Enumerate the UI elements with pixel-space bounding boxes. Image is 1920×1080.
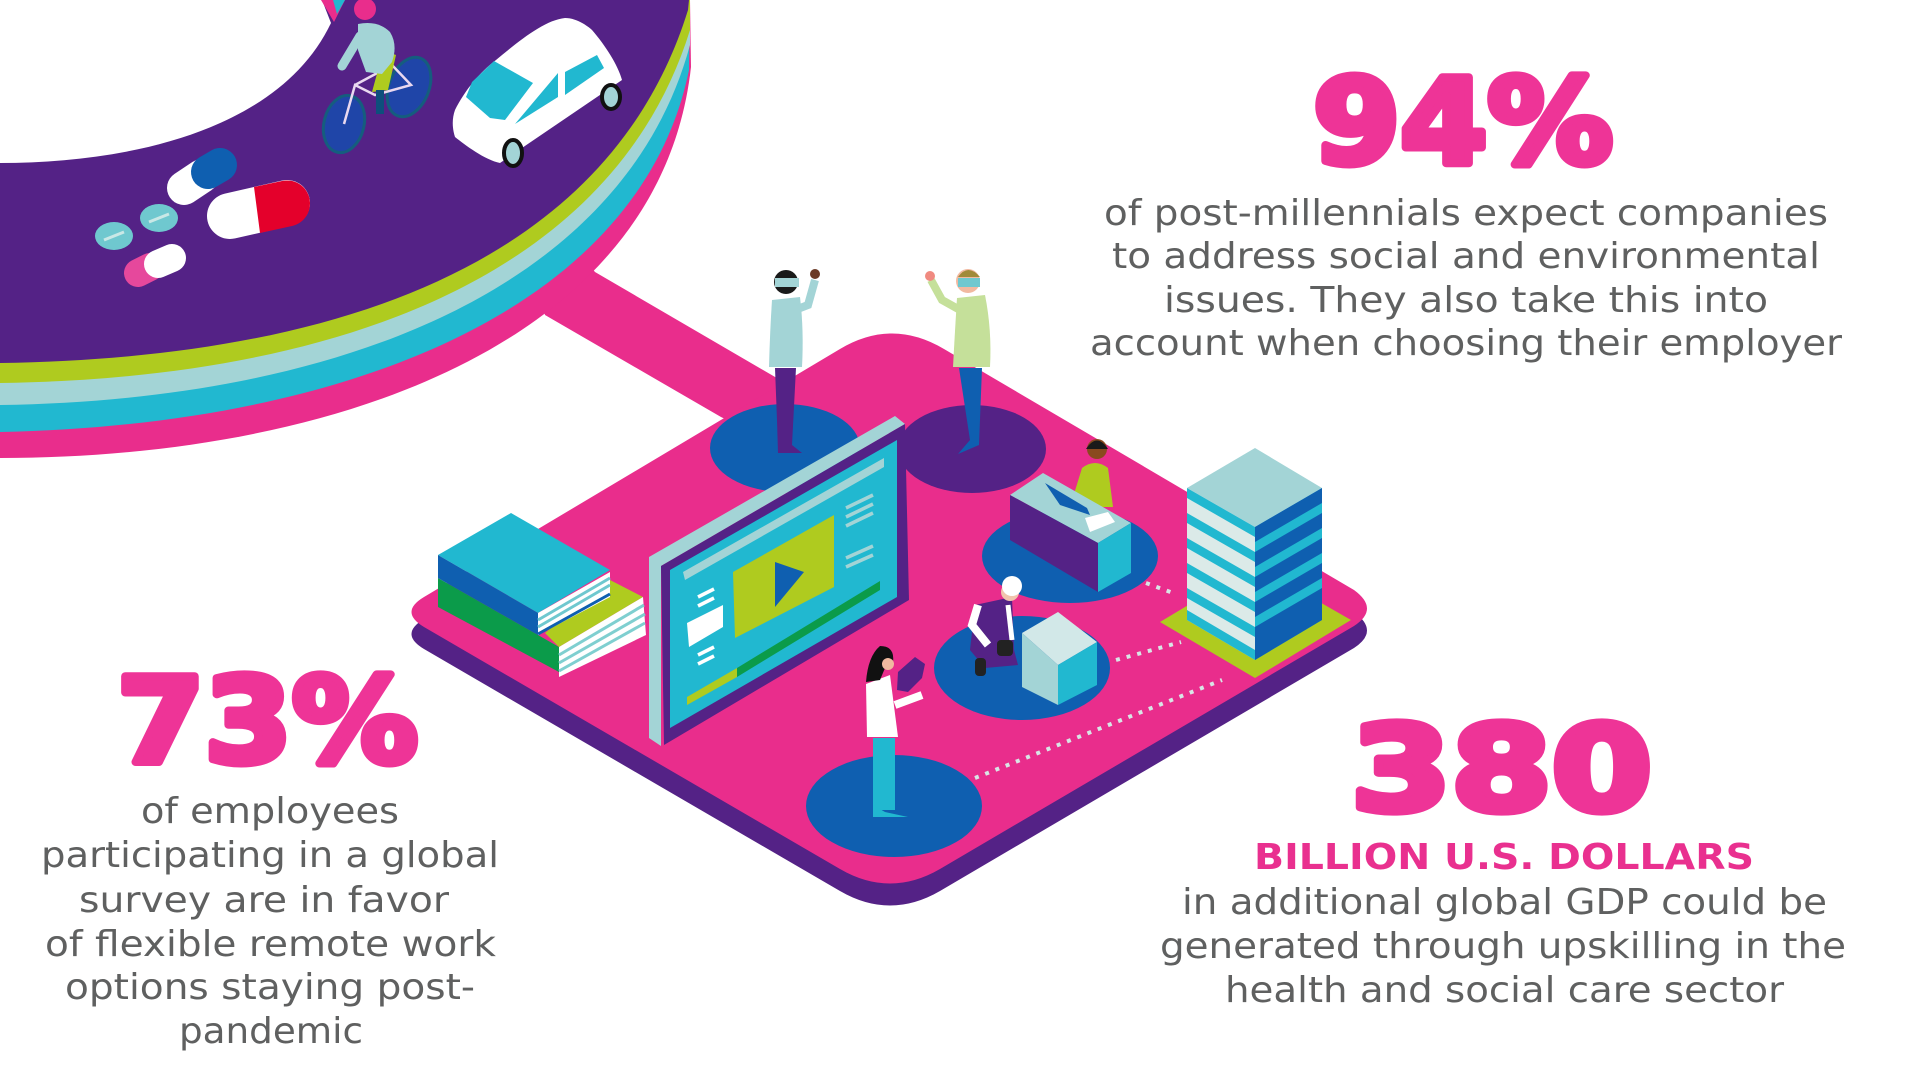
ring road with coloured layers — [0, 0, 691, 458]
stat: 94% — [1090, 53, 1842, 364]
description — [1160, 882, 1846, 1011]
icon: cyclist — [318, 0, 439, 157]
cube — [1022, 612, 1097, 705]
panel: isometric platform — [412, 334, 1367, 906]
description — [41, 791, 499, 1052]
description: survey are in favor — [79, 880, 449, 921]
disc: top left figure — [710, 404, 860, 492]
tower with green base — [1160, 448, 1351, 678]
number: 73% — [117, 652, 418, 790]
description: generated through upskilling in the — [1160, 926, 1846, 967]
description: issues. They also take this into — [1164, 280, 1768, 321]
stat: 380 billion — [1160, 700, 1846, 1011]
disc: woman with tablet — [806, 755, 982, 857]
description: in additional global GDP could be — [1182, 882, 1827, 923]
number: 380 — [1351, 700, 1652, 838]
figure: person at desk — [1010, 439, 1131, 592]
description: of post-millennials expect companies — [1104, 193, 1828, 234]
description — [1090, 193, 1842, 364]
figure: person with VR headset, left — [769, 269, 820, 453]
description: health and social care sector — [1225, 970, 1784, 1011]
disc: desk — [982, 509, 1158, 603]
number: 94% — [1313, 53, 1613, 191]
disc: cube — [934, 616, 1110, 720]
figure: crouching worker with cube — [970, 576, 1097, 705]
stat: 73% — [41, 652, 499, 1052]
icon: stacked books — [438, 513, 646, 677]
description: options staying post- — [65, 967, 475, 1008]
play button — [775, 562, 804, 607]
description: of employees — [141, 791, 399, 832]
figure: person with VR headset, right — [925, 269, 990, 454]
icon: pills — [95, 165, 310, 273]
dotted connection lines — [975, 583, 1222, 778]
disc: top right figure — [898, 405, 1046, 493]
description: pandemic — [179, 1011, 363, 1052]
description: account when choosing their employer — [1090, 323, 1842, 364]
description: of flexible remote work — [45, 924, 496, 965]
description: to address social and environmental — [1112, 236, 1820, 277]
connector arm between ring and platform — [540, 260, 830, 470]
icon: car — [453, 18, 622, 166]
description: participating in a global — [41, 835, 499, 876]
unit heading: BILLION U.S. DOLLARS — [1254, 837, 1754, 878]
figure: woman with tablet — [866, 646, 925, 817]
icon: video monitor — [649, 416, 909, 746]
